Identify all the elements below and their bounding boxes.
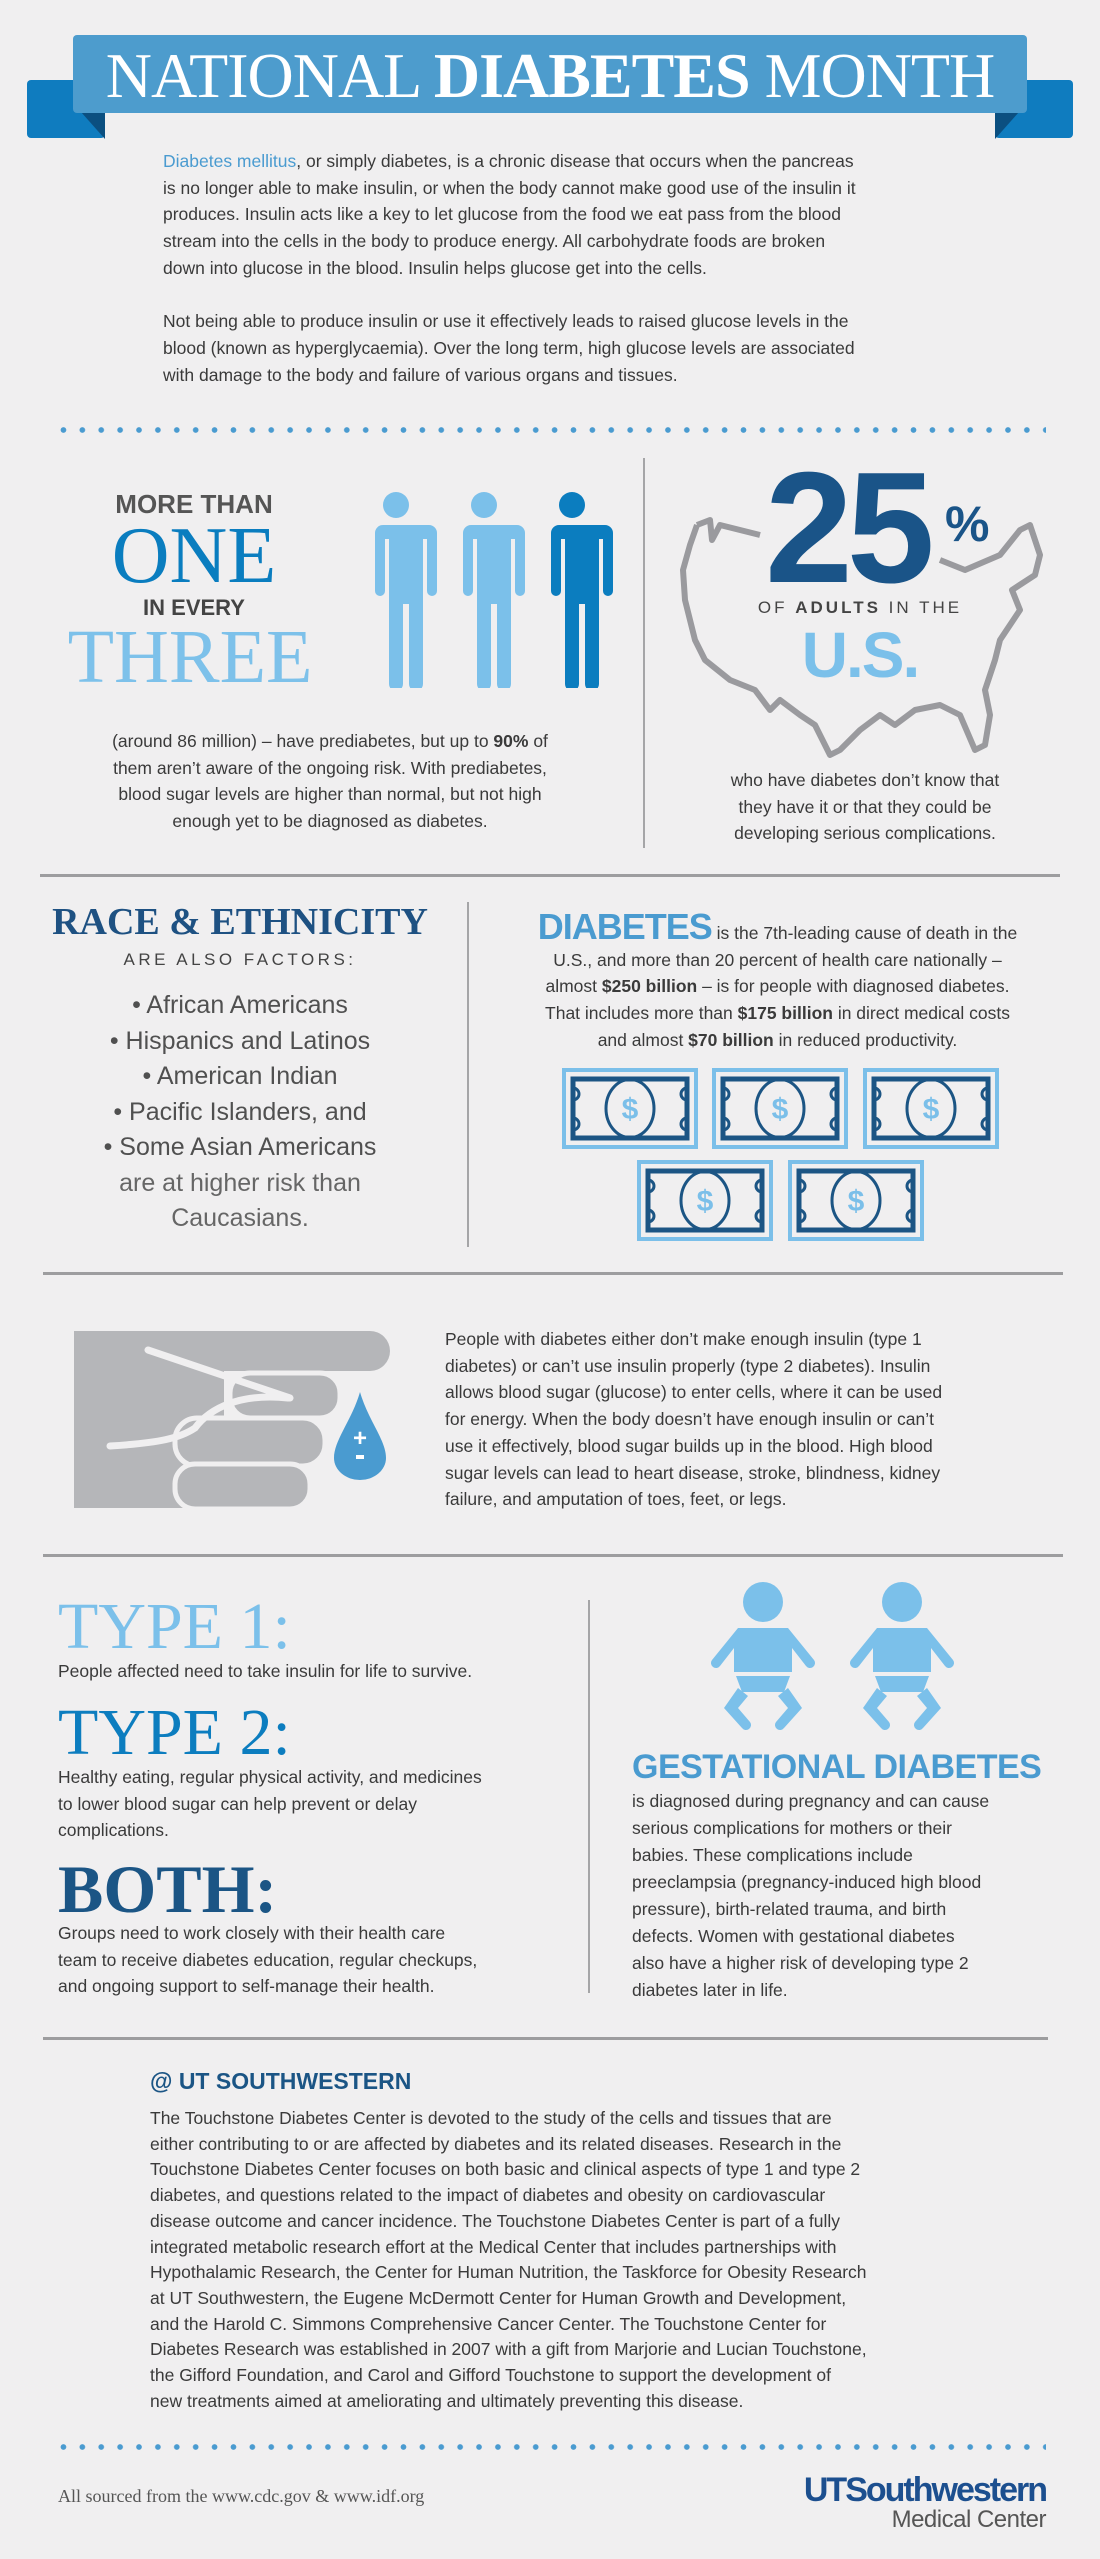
intro text: is no longer able to make insulin, or when the body cannot make good use of the insulin it (163, 178, 856, 198)
both: BOTH: (58, 1851, 277, 1927)
logo: UT Southwestern Medical Center: Medical Center (892, 2506, 1046, 2533)
text: insulin explanation: for energy. When the body doesn’t have enough insulin or can’t (445, 1409, 934, 1429)
icon: three people (375, 492, 613, 688)
heading: gestational diabetes: GESTATIONAL DIABETES (632, 1748, 1041, 1786)
icon: finger prick with blood drop (74, 1331, 390, 1508)
icon: blood drop: + (353, 1425, 367, 1452)
intro text: produces. Insulin acts like a key to let glucose from the food we eat pass from the blood (163, 204, 841, 224)
headline: more than one in every three: THREE (68, 615, 312, 699)
list of groups: are at higher risk than (119, 1168, 361, 1196)
25% stat: 25 (765, 440, 929, 616)
logo: UT Southwestern Medical Center: UTSouthwestern (804, 2471, 1046, 2509)
panel: UT Southwestern: The Touchstone Diabetes Center is devoted to the study of the cells and tissues that are (150, 2108, 832, 2128)
intro text: stream into the cells in the body to produce energy. All carbohydrate foods are broken (163, 231, 825, 251)
text: cost: almost $250 billion – is for people with diagnosed diabetes. (545, 976, 1010, 996)
panel: gestational diabetes: diabetes later in life. (632, 1980, 788, 2000)
panel: 25% of adults: % (945, 496, 989, 552)
list of groups: Caucasians. (171, 1204, 309, 1232)
panel: gestational diabetes (632, 1582, 1041, 2000)
text: cost: and almost $70 billion in reduced productivity. (598, 1030, 957, 1050)
panel: UT Southwestern: at UT Southwestern, the Eugene McDermott Center for Human Growth and Development, (150, 2288, 846, 2308)
panel: gestational diabetes: preeclampsia (pregnancy-induced high blood (632, 1872, 981, 1892)
panel: race & ethnicity (52, 901, 428, 1232)
panel: gestational diabetes: serious complications for mothers or their (632, 1818, 952, 1838)
intro text: blood (known as hyperglycaemia). Over the long term, high glucose levels are associated (163, 338, 855, 358)
panel: UT Southwestern: Diabetes Research was established in 2007 with a gift from Marjorie and Lucian Touchstone, (150, 2339, 867, 2359)
headline: more than one in every three: MORE THAN (115, 489, 273, 519)
panel: gestational diabetes: defects. Women with gestational diabetes (632, 1926, 955, 1946)
icon: two babies (711, 1582, 954, 1730)
panel: UT Southwestern: and the Harold C. Simmons Comprehensive Cancer Center. The Touchstone Center for (150, 2314, 826, 2334)
title banner (27, 35, 1073, 139)
type 2 (58, 1696, 482, 1840)
logo: UT Southwestern Medical Center (804, 2471, 1046, 2533)
text: unaware: developing serious complications. (734, 823, 996, 843)
both: Groups need to work closely with their health care (58, 1923, 445, 1943)
panel: 25% of adults (680, 440, 1043, 843)
intro text: with damage to the body and failure of various organs and tissues. (163, 365, 678, 385)
panel: 25% of adults: U.S. (802, 619, 918, 691)
list of groups: • Some Asian Americans (104, 1133, 376, 1161)
panel: 25% of adults: OF ADULTS IN THE (758, 598, 962, 617)
type 2: to lower blood sugar can help prevent or delay (58, 1794, 417, 1814)
type 1: People affected need to take insulin for life to survive. (58, 1661, 472, 1681)
panel: gestational diabetes: pressure), birth-related trauma, and birth (632, 1899, 946, 1919)
heading: @ UT Southwestern: @ UT SOUTHWESTERN (150, 2068, 411, 2094)
list of groups (104, 991, 376, 1232)
panel: one in every three (68, 489, 613, 831)
panel: UT Southwestern: diabetes, and questions related to the impact of diabetes and obesity on cardiovascular (150, 2185, 825, 2205)
list of groups: • American Indian (142, 1062, 337, 1090)
panel: UT Southwestern: Touchstone Diabetes Center focuses on both basic and clinical aspects of type 1 and type 2 (150, 2159, 860, 2179)
panel: UT Southwestern: new treatments aimed at ameliorating and ultimately preventing this disease. (150, 2391, 743, 2411)
type 2: complications. (58, 1820, 169, 1840)
text: cost: U.S., and more than 20 percent of health care nationally – (553, 950, 1002, 970)
panel: UT Southwestern: the Gifford Foundation, and Carol and Gifford Touchstone to support the development of (150, 2365, 831, 2385)
intro text: Diabetes mellitus, or simply diabetes, is a chronic disease that occurs when the pancreas (163, 151, 854, 171)
panel: UT Southwestern: integrated metabolic research effort at the Medical Center that includes partnerships with (150, 2237, 836, 2257)
panel: race & ethnicity: ARE ALSO FACTORS: (123, 950, 357, 969)
headline: more than one in every three (68, 489, 312, 699)
intro text (163, 151, 856, 385)
text: insulin explanation: failure, and amputation of toes, feet, or legs. (445, 1489, 786, 1509)
type 2: TYPE 2: (58, 1696, 291, 1769)
panel: gestational diabetes: babies. These complications include (632, 1845, 913, 1865)
panel: diabetes cost (538, 906, 1017, 1241)
panel: gestational diabetes: also have a higher risk of developing type 2 (632, 1953, 969, 1973)
footer: sources: All sourced from the www.cdc.gov & www.idf.org (58, 2486, 424, 2506)
text: prediabetes: blood sugar levels are higher than normal, but not high (118, 784, 542, 804)
intro text: down into glucose in the blood. Insulin helps glucose get into the cells. (163, 258, 707, 278)
text: prediabetes: them aren’t aware of the ongoing risk. With prediabetes, (113, 758, 547, 778)
intro text: Not being able to produce insulin or use it effectively leads to raised glucose levels in the (163, 311, 848, 331)
icon: money bills (562, 1068, 999, 1241)
text: prediabetes: (around 86 million) – have prediabetes, but up to 90% of (112, 731, 548, 751)
panel: gestational diabetes: is diagnosed during pregnancy and can cause (632, 1791, 989, 1811)
text: unaware: they have it or that they could be (739, 797, 991, 817)
text: insulin explanation: People with diabetes either don’t make enough insulin (type 1 (445, 1329, 922, 1349)
headline: more than one in every three: ONE (112, 512, 276, 600)
type 1 (58, 1590, 472, 1681)
text: insulin explanation: sugar levels can lead to heart disease, stroke, blindness, kidney (445, 1463, 940, 1483)
icon: blood drop (334, 1392, 386, 1480)
panel: UT Southwestern: either contributing to or are affected by diabetes and its related diseases. Research in the (150, 2134, 841, 2154)
heading: race & ethnicity: RACE & ETHNICITY (52, 901, 428, 943)
list of groups: • Pacific Islanders, and (113, 1098, 367, 1126)
both (58, 1851, 477, 1996)
panel: UT Southwestern: disease outcome and cancer incidence. The Touchstone Diabetes Center is part of a fully (150, 2211, 840, 2231)
type 2: Healthy eating, regular physical activity, and medicines (58, 1767, 482, 1787)
icon: US map outline (680, 517, 1043, 758)
list of groups: • African Americans (132, 991, 348, 1019)
text: cost: DIABETES is the 7th-leading cause of death in the (538, 906, 1017, 947)
list of groups: • Hispanics and Latinos (110, 1026, 370, 1054)
type 1: TYPE 1: (58, 1590, 291, 1663)
both: and ongoing support to self-manage their health. (58, 1976, 435, 1996)
headline: more than one in every three: IN EVERY (143, 595, 245, 620)
text: unaware (730, 770, 1000, 843)
text: insulin explanation: allows blood sugar (glucose) to enter cells, where it can be used (445, 1382, 942, 1402)
text: insulin explanation: diabetes) or can’t use insulin properly (type 2 diabetes). Insulin (445, 1356, 930, 1376)
panel: UT Southwestern: Hypothalamic Research, the Center for Human Nutrition, the Taskforce for Obesity Research (150, 2262, 867, 2282)
text: cost (538, 906, 1017, 1050)
text: prediabetes (112, 731, 548, 831)
text: insulin explanation (445, 1329, 942, 1509)
text: prediabetes: enough yet to be diagnosed as diabetes. (172, 811, 488, 831)
text: cost: That includes more than $175 billion in direct medical costs (545, 1003, 1010, 1023)
both: team to receive diabetes education, regular checkups, (58, 1950, 477, 1970)
title banner: NATIONAL DIABETES MONTH (106, 40, 994, 111)
panel: UT Southwestern (150, 2068, 867, 2411)
text: unaware: who have diabetes don’t know that (731, 770, 999, 790)
panel: types (58, 1590, 482, 1996)
text: insulin explanation: use it effectively, blood sugar builds up in the blood. High blood (445, 1436, 933, 1456)
